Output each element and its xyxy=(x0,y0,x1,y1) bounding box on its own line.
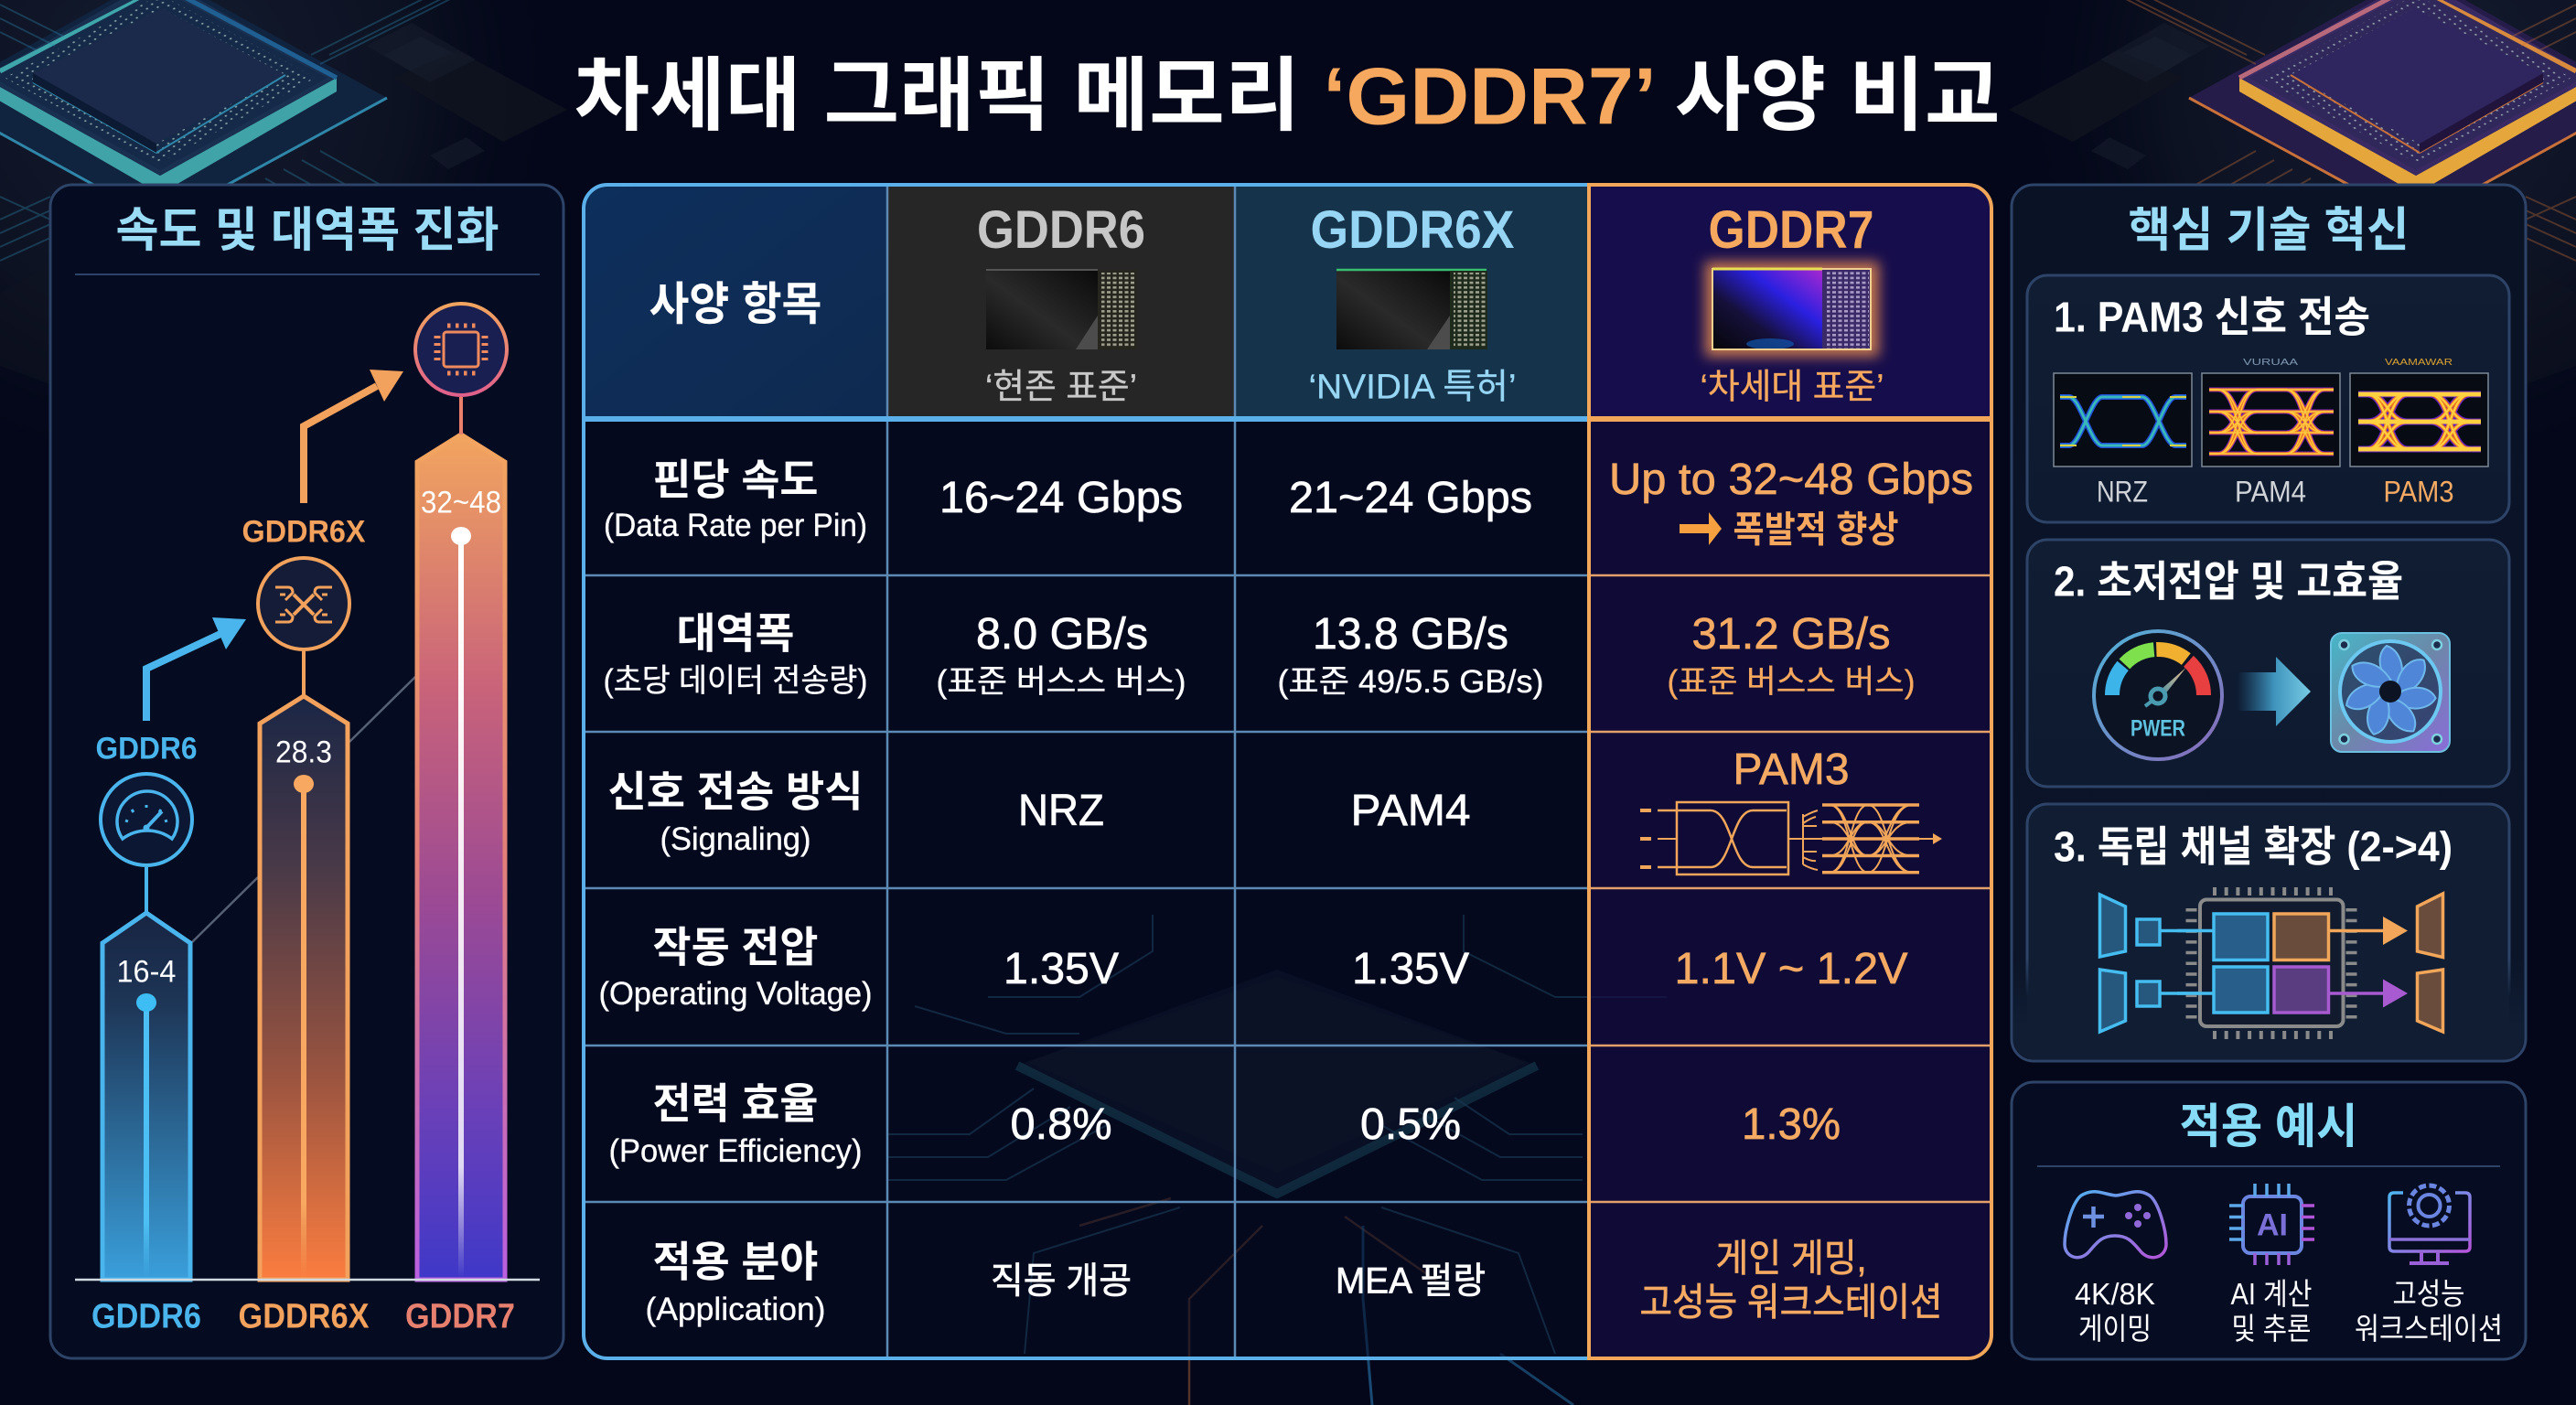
header: GDDR6: GDDR6 xyxy=(977,200,1145,260)
row: bandwidth xyxy=(604,609,1916,700)
row: bandwidth: 8.0 GB/s xyxy=(976,610,1148,659)
connector line 1 xyxy=(192,877,258,942)
row: power efficiency: 0.8% xyxy=(1010,1100,1112,1149)
row: data rate: 21~24 Gbps xyxy=(1289,474,1532,522)
row: power efficiency: 0.5% xyxy=(1360,1100,1461,1149)
row: signaling: PAM4 xyxy=(1350,787,1471,835)
bar: GDDR6: 16-4 xyxy=(117,955,176,990)
label: gaming: 게이밍 xyxy=(2078,1312,2152,1346)
row: data rate: 16~24 Gbps xyxy=(939,474,1183,522)
label: workstation xyxy=(2355,1277,2503,1346)
grid lines xyxy=(584,185,1589,1358)
row: voltage: 1.35V xyxy=(1004,945,1119,993)
icon: GDDR7 chip xyxy=(415,304,507,434)
arrow: boost xyxy=(1680,512,1722,545)
row: signaling: PAM3 xyxy=(1733,745,1850,794)
label: NRZ: NRZ xyxy=(2097,476,2148,509)
icon: power gauge xyxy=(2094,631,2222,759)
box: PAM3 signaling xyxy=(2027,275,2509,522)
row: bandwidth: 31.2 GB/s xyxy=(1692,610,1890,659)
row: application: 직동 개공 xyxy=(991,1260,1132,1301)
label: AI: 및 추론 xyxy=(2232,1312,2311,1346)
row: bandwidth: (표준 49/5.5 GB/s) xyxy=(1277,664,1544,700)
row: signaling: NRZ xyxy=(1018,787,1104,835)
bar: GDDR7: 32~48 xyxy=(421,485,501,520)
heading: application examples: 적용 예시 xyxy=(2179,1101,2358,1154)
panel: application examples xyxy=(2012,1082,2526,1359)
eye diagram: PAM4 xyxy=(2202,373,2340,467)
row: power efficiency: 1.3% xyxy=(1742,1100,1841,1149)
label: PAM4: PAM4 xyxy=(2235,476,2306,509)
background: central chip xyxy=(887,915,1667,1405)
small caption over PAM4: VURUAA xyxy=(2243,358,2298,368)
row: application: MEA 펄랑 xyxy=(1336,1260,1486,1301)
chip: GDDR6 xyxy=(986,269,1137,349)
bar: GDDR7 xyxy=(417,434,505,1280)
row: data rate: 핀당 속도 xyxy=(653,456,818,503)
row: voltage: 1.1V ~ 1.2V xyxy=(1674,945,1908,993)
row: data rate xyxy=(604,456,1973,551)
box: low voltage and efficiency xyxy=(2027,540,2509,787)
icon: game controller xyxy=(2065,1192,2166,1258)
header: GDDR6X: GDDR6X xyxy=(1310,200,1515,260)
icon: GDDR6 speedometer xyxy=(101,774,192,913)
eye diagram: PAM3 xyxy=(2350,373,2488,467)
icon: AI chip: AI xyxy=(2257,1207,2288,1242)
label: GDDR6X above: GDDR6X xyxy=(242,514,366,549)
row: bandwidth: 대역폭 xyxy=(677,609,794,657)
label: gaming xyxy=(2075,1277,2155,1346)
row: bandwidth: (표준 버스스 버스) xyxy=(1667,664,1916,700)
row: power efficiency xyxy=(609,1079,1841,1169)
label: bottom GDDR6X: GDDR6X xyxy=(238,1297,370,1335)
header: GDDR6X: ‘NVIDIA 특허’ xyxy=(1308,368,1517,406)
comparison table xyxy=(584,185,1991,1358)
diagram: four channel chip xyxy=(2100,891,2442,1035)
icon: cooling fan xyxy=(2331,633,2450,752)
arrow: GDDR6 to GDDR6X xyxy=(146,617,246,721)
background: purple chip top right xyxy=(1991,0,2576,512)
heading: core technology: 핵심 기술 혁신 xyxy=(2128,205,2410,258)
background: teal chip top left xyxy=(0,0,585,512)
icon: PAM3 signal diagram xyxy=(1640,802,1942,874)
header: spec item: 사양 항목 xyxy=(649,278,821,329)
icon: GDDR6X crossing signal xyxy=(258,558,349,695)
table cell backgrounds xyxy=(584,185,1991,1358)
eye diagram: NRZ xyxy=(2054,373,2192,467)
table border: orange GDDR7 column xyxy=(1589,185,1991,1358)
row: signaling: 신호 전송 방식 xyxy=(607,768,864,816)
header: GDDR6X xyxy=(1308,200,1517,406)
icon: AI chip xyxy=(2229,1184,2314,1265)
heading: speed and bandwidth: 속도 및 대역폭 진화 xyxy=(115,205,499,258)
label: PAM3: PAM3 xyxy=(2384,476,2453,509)
box: independent channels: 3. 독립 채널 확장 (2->4) xyxy=(2054,823,2453,871)
label: bottom GDDR7: GDDR7 xyxy=(405,1297,515,1335)
row: voltage: (Operating Voltage) xyxy=(598,976,873,1012)
header: GDDR7: GDDR7 xyxy=(1709,200,1873,260)
label: GDDR6 above: GDDR6 xyxy=(95,732,198,767)
row: data rate: Up to 32~48 Gbps xyxy=(1609,456,1973,504)
table border: blue xyxy=(584,185,1589,1358)
box: PAM3 signaling: 1. PAM3 신호 전송 xyxy=(2054,293,2370,340)
header: GDDR7: ‘차세대 표준’ xyxy=(1700,368,1884,406)
title: 차세대 그래픽 메모리 ‘GDDR7’ 사양 비교 xyxy=(574,50,2000,141)
row: bandwidth: (표준 버스스 버스) xyxy=(937,664,1186,700)
row: application: 고성능 워크스테이션 xyxy=(1639,1281,1943,1324)
row: bandwidth: (초당 데이터 전송량) xyxy=(604,663,867,699)
row: signaling xyxy=(607,745,1942,874)
icon: power gauge: PWER xyxy=(2131,715,2185,741)
panel: speed and bandwidth evolution xyxy=(50,185,564,1358)
label: gaming: 4K/8K xyxy=(2075,1277,2155,1311)
arrow: gauge to fan xyxy=(2238,657,2311,726)
row: bandwidth: 13.8 GB/s xyxy=(1313,610,1508,659)
row: application: (Application) xyxy=(646,1292,825,1327)
small caption over PAM3: VAAMAWAR xyxy=(2385,358,2453,368)
box: low voltage and efficiency: 2. 초저전압 및 고효율 xyxy=(2054,558,2403,606)
panel: core technology innovation xyxy=(2012,185,2526,1061)
header: GDDR7 xyxy=(1700,200,1884,406)
row: power efficiency: 전력 효율 xyxy=(653,1079,818,1127)
box: independent channels xyxy=(2013,804,2524,1059)
row: voltage: 1.35V xyxy=(1352,945,1469,993)
row: signaling: (Signaling) xyxy=(660,821,810,857)
row: application xyxy=(646,1237,1943,1327)
arrow: GDDR6X to GDDR7 xyxy=(304,370,403,503)
row: application: 게인 게밍, xyxy=(1716,1237,1866,1280)
label: AI xyxy=(2230,1277,2313,1346)
row: data rate: 폭발적 향상 xyxy=(1733,510,1899,551)
row: application: 적용 분야 xyxy=(653,1239,818,1286)
bar: GDDR6 xyxy=(102,913,190,1280)
chip: GDDR6X xyxy=(1336,269,1487,349)
icon: workstation monitor xyxy=(2389,1185,2470,1263)
connector line 2 xyxy=(349,677,415,742)
row: voltage: 작동 전압 xyxy=(653,924,818,971)
label: workstation: 워크스테이션 xyxy=(2355,1312,2503,1346)
chip: GDDR7 xyxy=(1705,262,1879,357)
row: power efficiency: (Power Efficiency) xyxy=(609,1133,862,1169)
bar: GDDR6X xyxy=(260,696,348,1280)
label: bottom GDDR6: GDDR6 xyxy=(91,1297,201,1335)
label: AI: AI 계산 xyxy=(2230,1277,2313,1311)
label: workstation: 고성능 xyxy=(2393,1277,2464,1311)
row: voltage xyxy=(598,924,1908,1012)
row: data rate: (Data Rate per Pin) xyxy=(604,508,867,543)
header: GDDR6 xyxy=(977,200,1145,406)
bar: GDDR6X: 28.3 xyxy=(275,735,332,770)
header: GDDR6: ‘현존 표준’ xyxy=(985,368,1137,406)
